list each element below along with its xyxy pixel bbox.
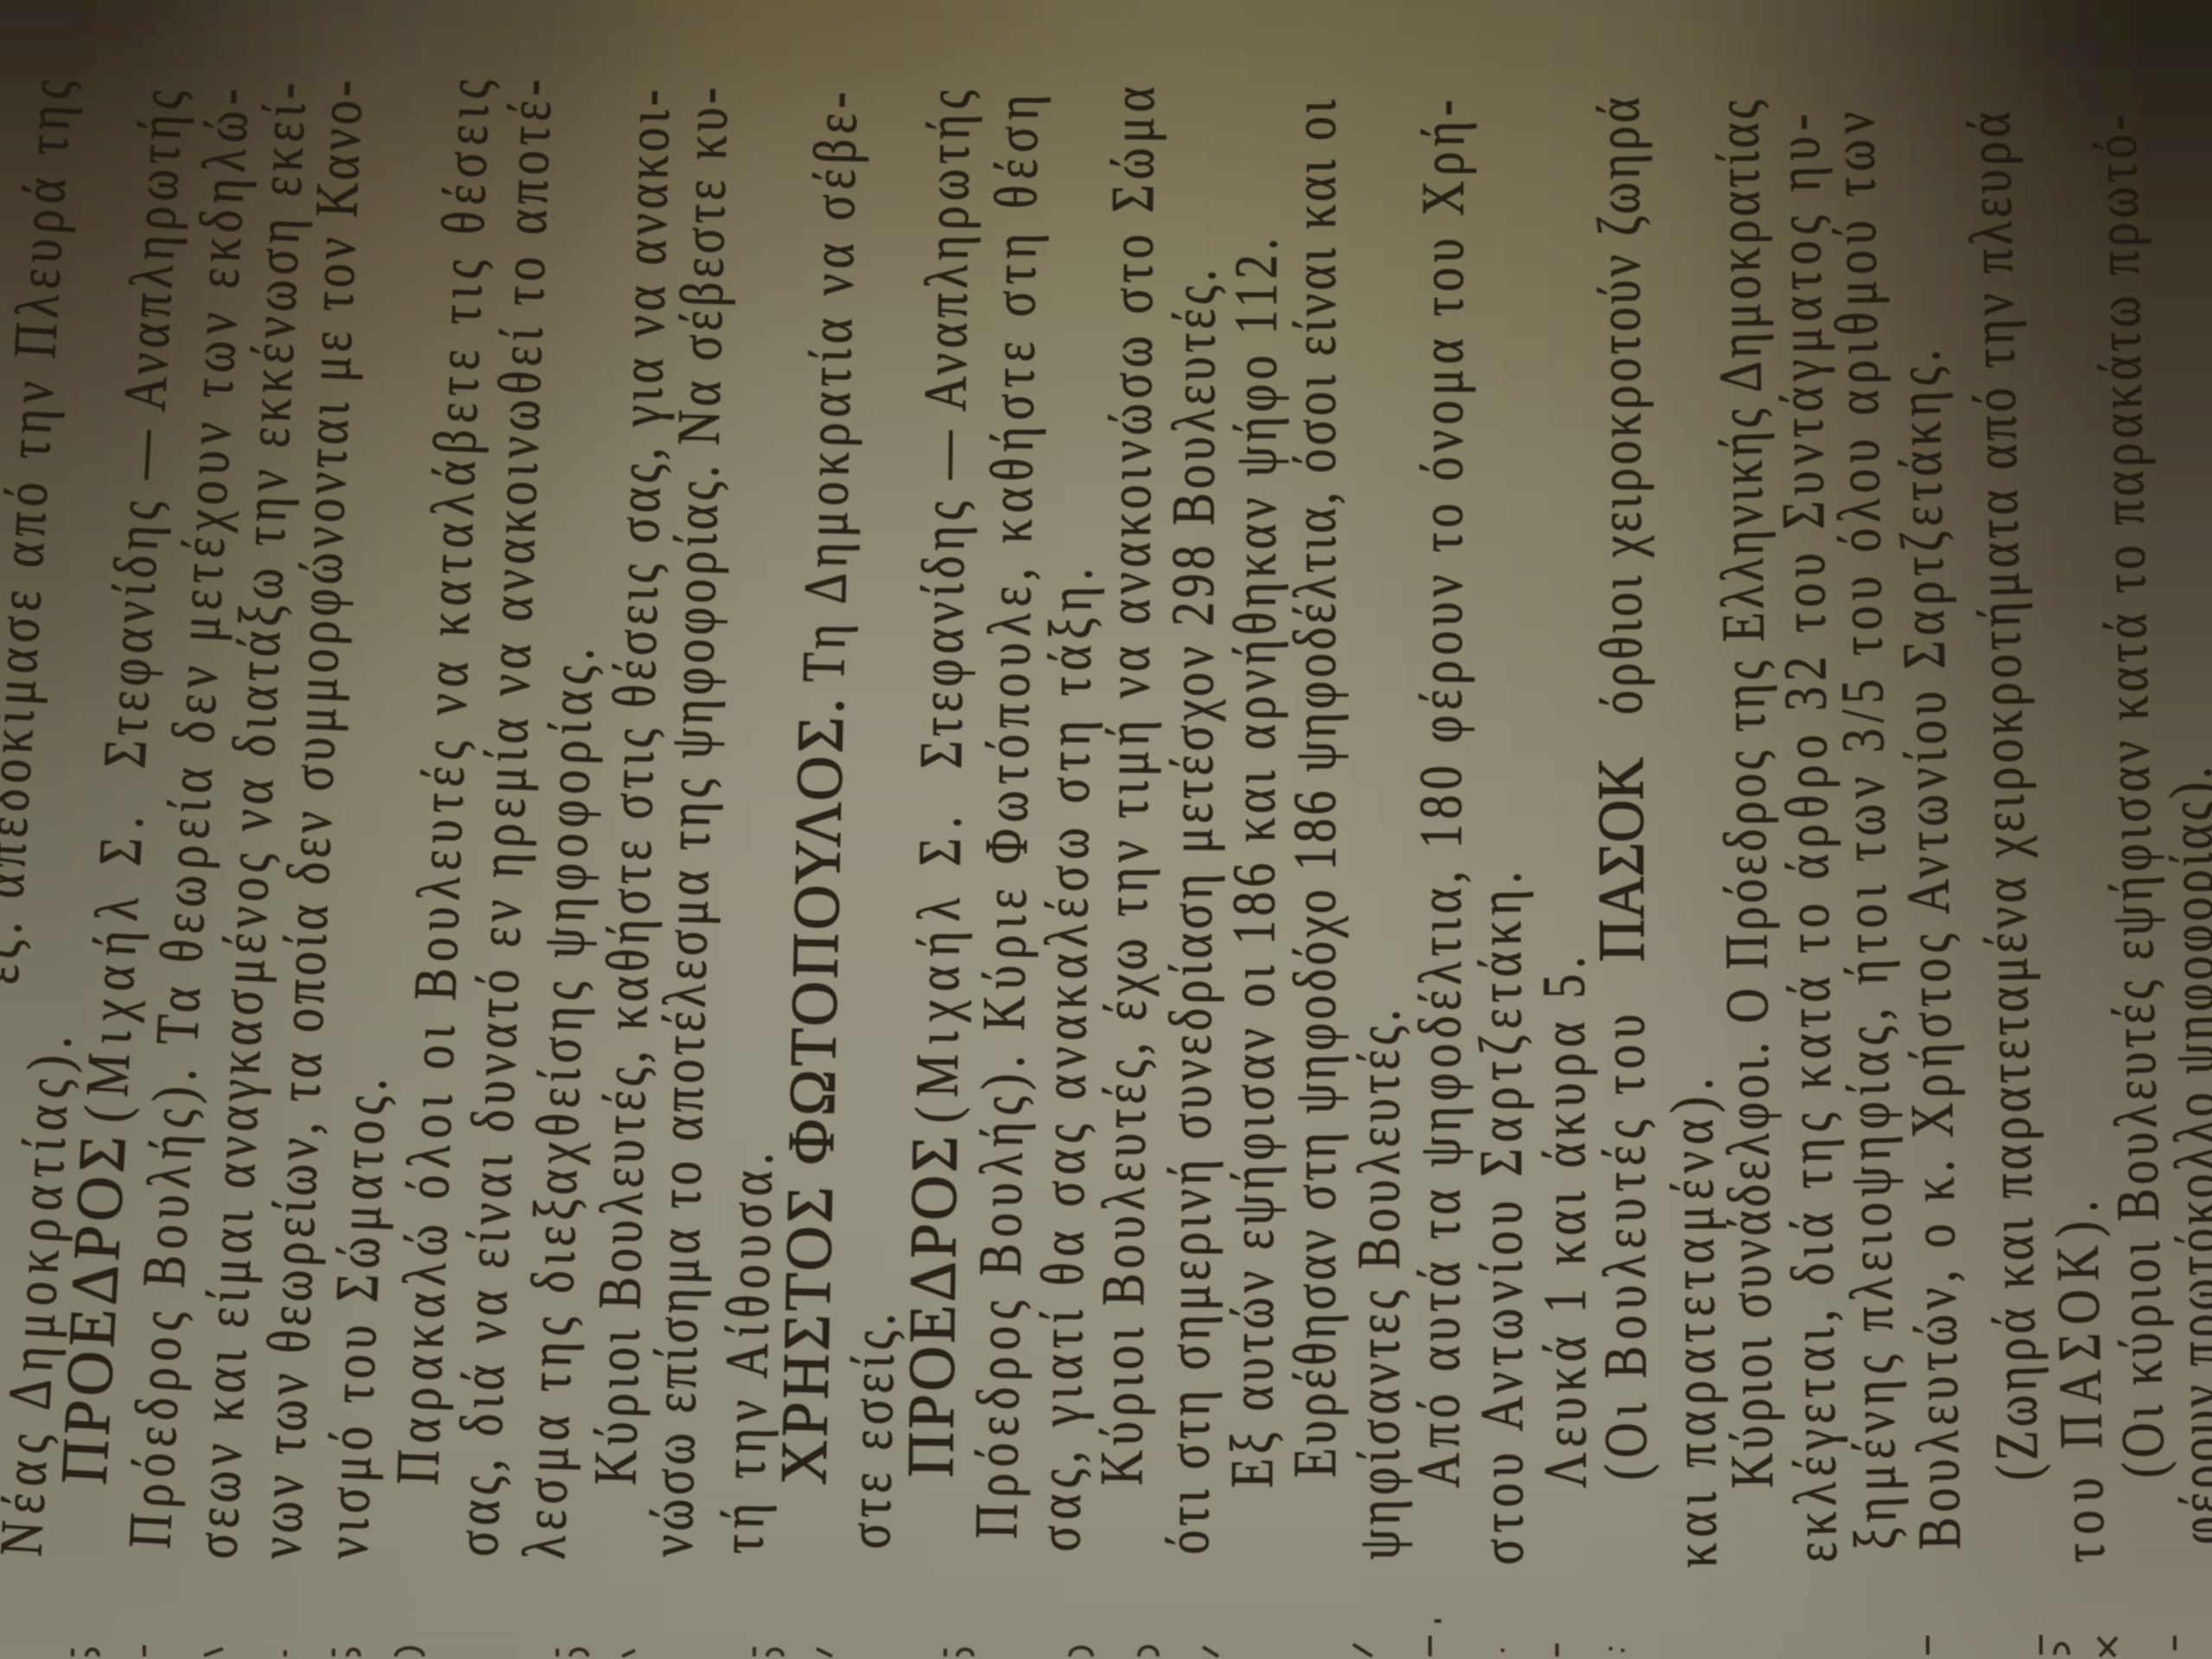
text line: Κύριοι Βουλευτές, καθήστε στις θέσεις σας, για να ανακοι- xyxy=(582,89,683,1485)
text line: Παρακαλώ όλοι οι Βουλευτές να καταλάβετε τις θέσεις xyxy=(384,79,502,1486)
speaker line: ΠΡΟΕΔΡΟΣ (Μιχαήλ Σ. Στεφανίδης): (Μιχαήλ Σ. xyxy=(903,816,974,1123)
speaker line: ΠΡΟΕΔΡΟΣ (Μιχαήλ Σ. Στεφανίδης) xyxy=(48,88,195,1486)
text line: ΠΑΣΟΚ applause: (Οι Βουλευτές του xyxy=(1590,1014,1659,1480)
text line: νισμό του Σώματος. xyxy=(313,1077,399,1560)
text line: Εξ αυτών εψήφισαν οι 186 και αρνήθηκαν ψήφο 112. xyxy=(1218,238,1290,1488)
text line: σεων και είμαι αναγκασμένος να διατάξω την εκκένωση εκεί- xyxy=(182,81,319,1560)
text line: ΠΑΣΟΚ applause: ΠΑΣΟΚ xyxy=(1584,757,1658,962)
speaker line: ΧΡΗΣΤΟΣ ΦΩΤΟΠΟΥΛΟΣ xyxy=(767,92,870,1485)
text line: ξημένης πλειοψηφίας, ήτοι των 3/5 του όλου αριθμού των xyxy=(1820,111,1909,1550)
text line: Λευκά 1 και άκυρα 5. xyxy=(1530,957,1599,1488)
speaker line: ΠΡΟΕΔΡΟΣ (Μιχαήλ Σ. Στεφανίδης): Στεφανίδης — Αναπληρωτής xyxy=(907,90,982,769)
text line: σας, διά να είναι δυνατό εν ηρεμία να ανακοινωθεί το αποτέ- xyxy=(443,78,564,1558)
text line: Ευρέθησαν στη ψηφοδόχο 186 ψηφοδέλτια, όσοι είναι και οι xyxy=(1281,100,1348,1478)
text line: (Οι κύριοι Βουλευτές εψήφισαν κατά το παρακάτω πρωτό- xyxy=(2082,114,2177,1478)
text line: και παρατεταμένα). xyxy=(1658,1077,1729,1568)
text line: ότι στη σημερινή συνεδρίαση μετέσχον 298 Βουλευτές. xyxy=(1154,269,1228,1554)
text line: ΠΑΣΟΚ applause: όρθιοι χειροκροτούν ζωηρά xyxy=(1585,98,1655,715)
text line: νων των θεωρείων, τα οποία δεν συμμορφώνονται με τον Κανο- xyxy=(246,79,375,1560)
marginal ink fragments along the bottom edge xyxy=(73,1619,2175,1656)
speaker line: ΠΡΟΕΔΡΟΣ (Μιχαήλ Σ. Στεφανίδης): (Μιχαήλ Σ. xyxy=(72,814,156,1124)
speaker line: ΧΡΗΣΤΟΣ ΦΩΤΟΠΟΥΛΟΣ: Τη Δημοκρατία να σέβε- xyxy=(790,92,870,683)
text line: Πρόεδρος Βουλής). Κύριε Φωτόπουλε, καθήστε στη θέση xyxy=(963,94,1051,1539)
speaker line: ΠΡΟΕΔΡΟΣ (Μιχαήλ Σ. Στεφανίδης): ΠΡΟΕΔΡΟΣ xyxy=(48,1134,140,1486)
text line: νώσω επίσημα το αποτέλεσμα της ψηφοφορίας. Να σέβεστε κυ- xyxy=(638,86,741,1557)
text line: Κύριοι συνάδελφοι. Ο Πρόεδρος της Ελληνικής Δημοκρατίας xyxy=(1704,100,1785,1489)
text line: Από αυτά τα ψηφοδέλτια, 180 φέρουν το όνομα του Χρή- xyxy=(1405,99,1477,1488)
text line: τή την Αίθουσα. xyxy=(709,1152,785,1554)
speaker line: ΠΡΟΕΔΡΟΣ (Μιχαήλ Σ. Στεφανίδης): ΠΡΟΕΔΡΟΣ xyxy=(894,1135,971,1478)
text line: Πρόεδρος Βουλής). Τα θεωρεία δεν μετέχουν των εκδηλώ- xyxy=(116,86,262,1550)
text line: Βουλευτών, ο κ. Χρήστος Αντωνίου Σαρτζετάκης. xyxy=(1885,349,1973,1550)
text line: του ΠΑΣΟΚ). xyxy=(2043,1200,2117,1563)
text line: Κύριοι Βουλευτές, έχω την τιμή να ανακοινώσω στο Σώμα xyxy=(1088,86,1167,1485)
speaker line: ΧΡΗΣΤΟΣ ΦΩΤΟΠΟΥΛΟΣ: ΧΡΗΣΤΟΣ ΦΩΤΟΠΟΥΛΟΣ. xyxy=(767,697,858,1485)
speaker line: ΠΡΟΕΔΡΟΣ (Μιχαήλ Σ. Στεφανίδης): Στεφανίδης — Αναπληρωτής xyxy=(91,88,195,770)
text line: εκλέγεται, διά της κατά το άρθρο 32 του Συντάγματος ηυ- xyxy=(1765,114,1849,1563)
text line: λεσμα της διεξαχθείσης ψηφοφορίας. xyxy=(511,646,607,1560)
text line: ψηφίσαντες Βουλευτές. xyxy=(1345,1009,1412,1560)
text line: (Ζωηρά και παρατεταμένα χειροκροτήματα από την πλευρά xyxy=(1955,111,2050,1481)
text line: ΠΑΣΟΚ applause xyxy=(1584,98,1659,1480)
text line: σας, γιατί θα σας ανακαλέσω στη τάξη. xyxy=(1026,568,1104,1552)
speaker line: ΠΡΟΕΔΡΟΣ (Μιχαήλ Σ. Στεφανίδης) xyxy=(894,90,982,1478)
text line: στου Αντωνίου Σαρτζετάκη. xyxy=(1466,872,1535,1565)
text line: στε εσείς. xyxy=(836,1313,907,1549)
